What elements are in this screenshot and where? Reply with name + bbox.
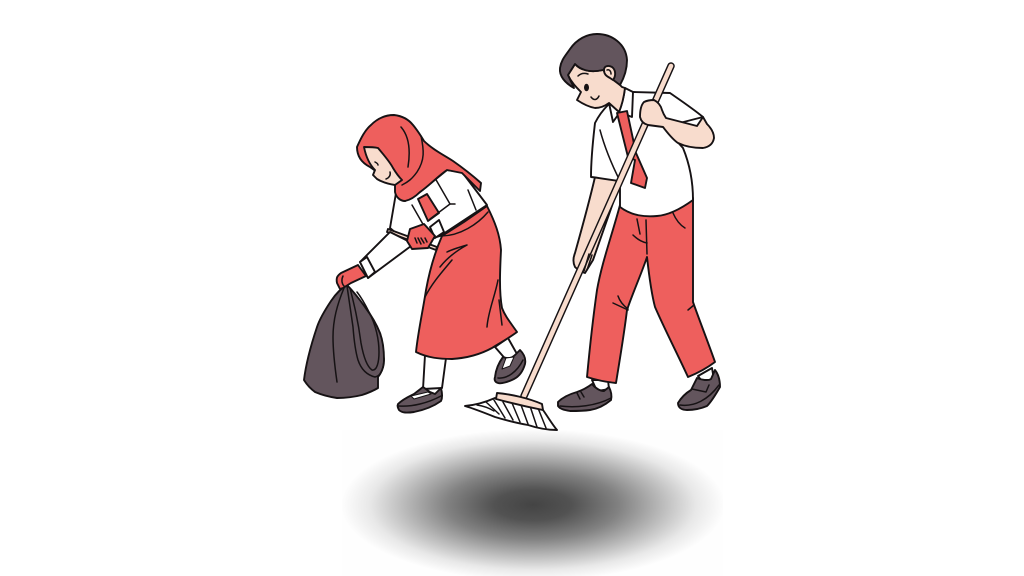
broom head: [465, 393, 557, 430]
fingers on stick: [584, 254, 592, 271]
rubbish bag: [304, 285, 384, 398]
litter stick: [387, 229, 437, 250]
upper arm cuff: [430, 220, 444, 238]
trousers: [587, 198, 715, 383]
skirt: [416, 206, 517, 359]
figure: girl with bag: [304, 115, 525, 413]
reaching arm: [360, 232, 411, 278]
lower arm and hand: [574, 177, 621, 273]
shoes: [558, 370, 720, 411]
shirt: [591, 92, 703, 216]
ground shadow: [342, 430, 723, 576]
face: [364, 147, 402, 185]
upper arm and hand: [640, 100, 714, 148]
neck and face: [568, 64, 625, 112]
hijab: [357, 115, 481, 201]
glove: holding stick: [407, 224, 435, 249]
hair: [560, 34, 627, 88]
front leg and shoe: [398, 355, 446, 413]
glove: holding bag: [337, 265, 366, 289]
back leg and shoe: [495, 338, 525, 383]
figure: boy with broom: [465, 34, 720, 430]
broom stick: [524, 66, 671, 396]
necktie: [617, 111, 647, 188]
ear: [604, 66, 615, 80]
shirt torso: [390, 170, 487, 245]
socks: [592, 368, 714, 391]
collar: [609, 88, 633, 122]
necktie strap: [418, 194, 439, 221]
